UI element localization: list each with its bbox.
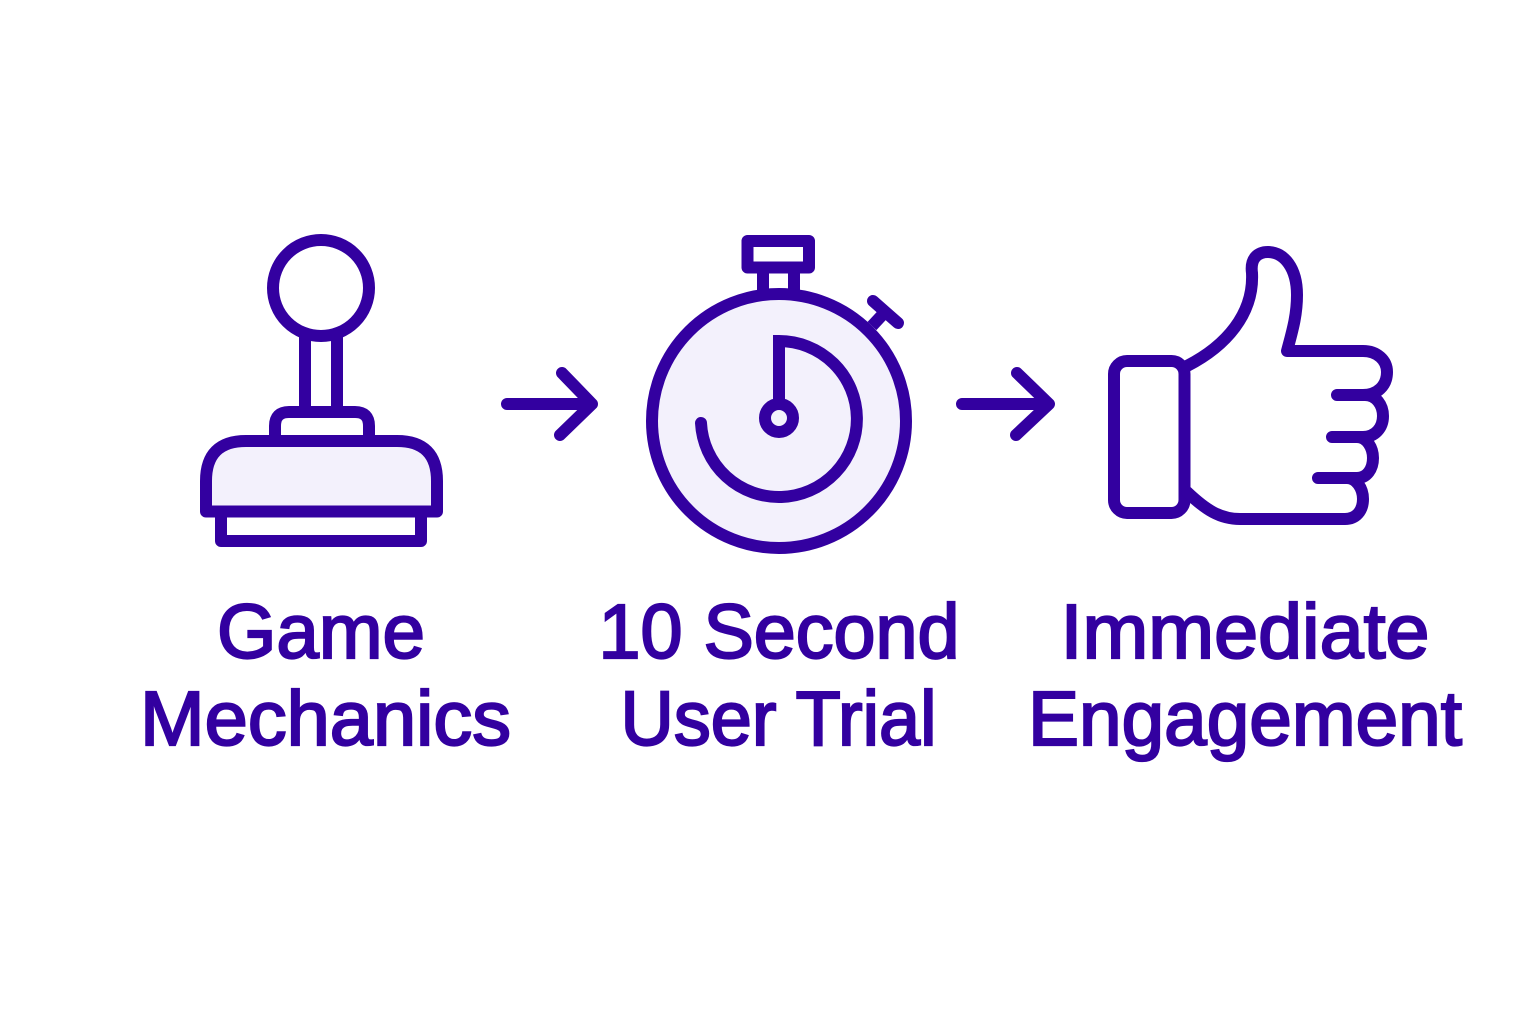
arrow: joystick to stopwatch [507,373,592,435]
label: Game Mechanics [140,589,511,762]
label: 10 Second User Trial [598,589,960,762]
label: 10 Second User Trial: User Trial [620,676,936,762]
label: Game Mechanics: Mechanics [140,676,511,762]
label: 10 Second User Trial: 10 Second [598,589,960,675]
arrow: stopwatch to thumbs up [962,373,1049,435]
icon: thumbs up [1114,252,1387,519]
icon: joystick [206,240,437,541]
label: Immediate Engagement: Engagement [1028,676,1462,762]
label: Immediate Engagement: Immediate [1060,589,1430,675]
label: Immediate Engagement [1028,589,1462,762]
label: Game Mechanics: Game [217,589,425,675]
icon: stopwatch [652,241,906,548]
